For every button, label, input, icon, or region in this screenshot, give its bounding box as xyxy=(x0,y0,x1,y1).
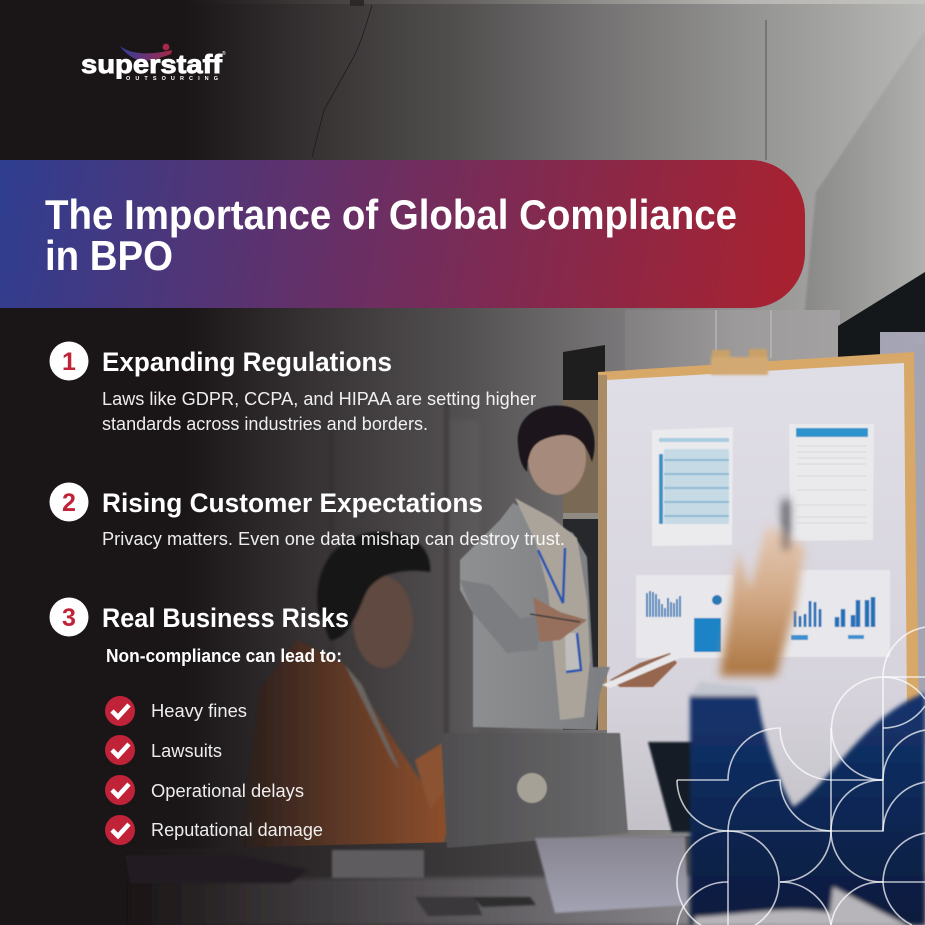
white table edge xyxy=(695,887,907,925)
lanyard and badge xyxy=(565,633,581,672)
logo: superstaff outsourcing xyxy=(81,44,226,82)
section 2: rising customer expectations xyxy=(50,482,565,549)
logo tagline: OUTSOURCING xyxy=(126,76,218,82)
heading 2: Rising Customer Expectations xyxy=(102,488,483,518)
intro line: Non-compliance can lead to: xyxy=(106,646,342,666)
body 1: standards across industries and borders. xyxy=(102,414,428,434)
item: reputational damage: Reputational damage xyxy=(151,820,323,840)
number badge 3 xyxy=(50,598,88,636)
whiteboard clip xyxy=(711,349,768,375)
presenter xyxy=(460,406,680,730)
pinned paper: right chart xyxy=(768,570,890,657)
head xyxy=(528,421,586,495)
pinned paper: table xyxy=(652,427,733,546)
photo foreground: people and whiteboard xyxy=(125,310,925,925)
dark window corner xyxy=(563,345,605,400)
item: reputational damage xyxy=(105,815,323,845)
number badge 3: 3 xyxy=(62,604,76,632)
pinned paper: form xyxy=(789,424,874,541)
title banner xyxy=(0,160,805,308)
hanging wires to clip xyxy=(716,310,771,358)
pinned paper: left chart xyxy=(636,575,734,658)
dark monitor xyxy=(648,742,700,832)
suit xyxy=(460,503,610,730)
heading 1: Expanding Regulations xyxy=(102,347,392,377)
body 2: Privacy matters. Even one data mishap can destroy trust. xyxy=(102,529,565,549)
whiteboard frame xyxy=(598,352,919,730)
item: operational delays xyxy=(105,775,304,805)
ceiling hanger and cables xyxy=(350,0,364,6)
title: in BPO xyxy=(45,232,173,279)
item: operational delays: Operational delays xyxy=(151,781,304,801)
item: heavy fines xyxy=(105,696,247,726)
paper stack and desk items xyxy=(125,836,688,916)
item: lawsuits xyxy=(105,735,222,765)
navy sleeve xyxy=(690,682,925,925)
logo wordmark: superstaff xyxy=(81,49,222,79)
logo dot xyxy=(163,44,169,50)
outstretched hand xyxy=(533,597,587,642)
item: heavy fines: Heavy fines xyxy=(151,701,247,721)
item: lawsuits: Lawsuits xyxy=(151,741,222,761)
logo swoosh xyxy=(120,46,172,61)
laptop xyxy=(441,733,628,848)
body 1: Laws like GDPR, CCPA, and HIPAA are setting higher xyxy=(102,389,536,409)
title: The Importance of Global Compliance xyxy=(45,191,737,238)
raised hand xyxy=(720,500,805,676)
shirt xyxy=(515,498,590,720)
number badge 2: 2 xyxy=(62,489,76,517)
arm xyxy=(460,580,545,653)
seated colleague xyxy=(240,532,470,880)
number badge 2 xyxy=(50,482,88,522)
section 3: real business risks xyxy=(50,598,349,845)
section 1: expanding regulations xyxy=(50,342,536,434)
checklist xyxy=(105,696,323,845)
heading 3: Real Business Risks xyxy=(102,603,349,633)
window xyxy=(838,272,925,360)
back room xyxy=(200,312,625,762)
number badge 1: 1 xyxy=(62,348,76,376)
logo registered mark: ® xyxy=(222,50,226,57)
shelf behind presenter xyxy=(563,400,600,514)
desk xyxy=(130,836,700,925)
whiteboard surface xyxy=(607,363,908,830)
tablet hand xyxy=(610,653,677,687)
number badge 1 xyxy=(50,342,88,380)
decorative lattice pattern xyxy=(677,627,925,925)
right wall plane xyxy=(800,30,925,360)
